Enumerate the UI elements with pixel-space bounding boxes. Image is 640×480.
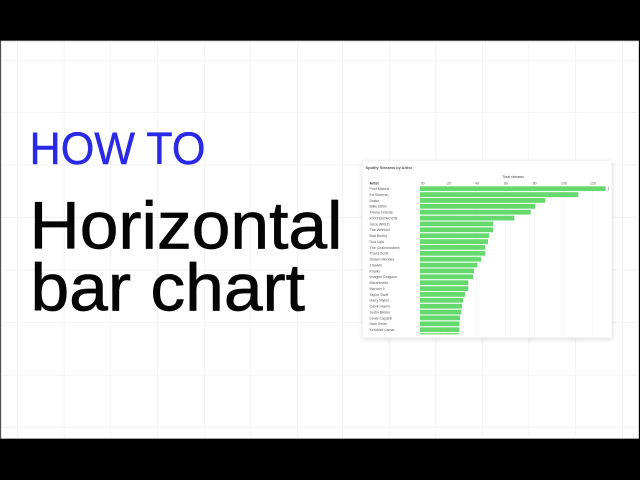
heading line: bar chart: bar chart bbox=[30, 252, 305, 326]
green bars bbox=[420, 186, 606, 334]
artist labels: Post Malone bbox=[370, 187, 389, 191]
artist labels: Taylor Swift bbox=[370, 293, 388, 297]
heading line: horizontal: Horizontal bbox=[30, 189, 342, 263]
artist labels: XXXTENTACION bbox=[370, 216, 398, 220]
artist labels: Calvin Harris bbox=[370, 304, 390, 308]
axis labels: 80 bbox=[533, 181, 537, 185]
axis labels: 20 bbox=[447, 181, 451, 185]
artist labels: Marshmello bbox=[370, 281, 388, 285]
chart title: Spotify Streams by Artist bbox=[366, 165, 413, 170]
artist labels: Travis Scott bbox=[370, 252, 388, 256]
heading: horizontal bar chart bbox=[30, 189, 342, 326]
artist labels: Sam Smith bbox=[370, 322, 387, 326]
artist labels: Khalid bbox=[370, 269, 380, 273]
artist labels: Bad Bunny bbox=[370, 234, 387, 238]
artist labels: Lewis Capaldi bbox=[370, 316, 392, 320]
column header: artist: Artist bbox=[370, 181, 379, 185]
panel: bar chart card bbox=[363, 161, 612, 338]
axis labels: 100 bbox=[561, 181, 567, 185]
card shadow bbox=[363, 162, 612, 339]
artist labels: Ariana Grande bbox=[370, 210, 393, 214]
axis labels: 120 bbox=[590, 181, 596, 185]
axis labels: 00 bbox=[421, 181, 425, 185]
value tick mark bbox=[607, 186, 610, 190]
artist labels: Juice WRLD bbox=[370, 222, 390, 226]
artist labels bbox=[370, 187, 400, 332]
artist labels: Kendrick Lamar bbox=[370, 328, 395, 332]
artist labels: The Chainsmokers bbox=[370, 246, 400, 250]
artist labels: Maroon 5 bbox=[370, 287, 385, 291]
artist labels: The Weeknd bbox=[370, 228, 390, 232]
axis labels: 60 bbox=[504, 181, 508, 185]
artist labels: Drake bbox=[370, 199, 379, 203]
artist labels: Billie Eilish bbox=[370, 205, 387, 209]
heading: how to: HOW TO bbox=[30, 123, 206, 174]
artist labels: Shawn Mendes bbox=[370, 258, 394, 262]
artist labels: Ed Sheeran bbox=[370, 193, 388, 197]
artist labels: Imagine Dragons bbox=[370, 275, 397, 279]
artist labels: Harry Styles bbox=[370, 299, 389, 303]
artist labels: Dua Lipa bbox=[370, 240, 384, 244]
artist labels: Justin Bieber bbox=[370, 310, 391, 314]
artist labels: J Balvin bbox=[370, 263, 382, 267]
axis title: Total streams bbox=[502, 175, 524, 179]
axis labels: 40 bbox=[475, 181, 479, 185]
axis labels bbox=[421, 181, 596, 185]
